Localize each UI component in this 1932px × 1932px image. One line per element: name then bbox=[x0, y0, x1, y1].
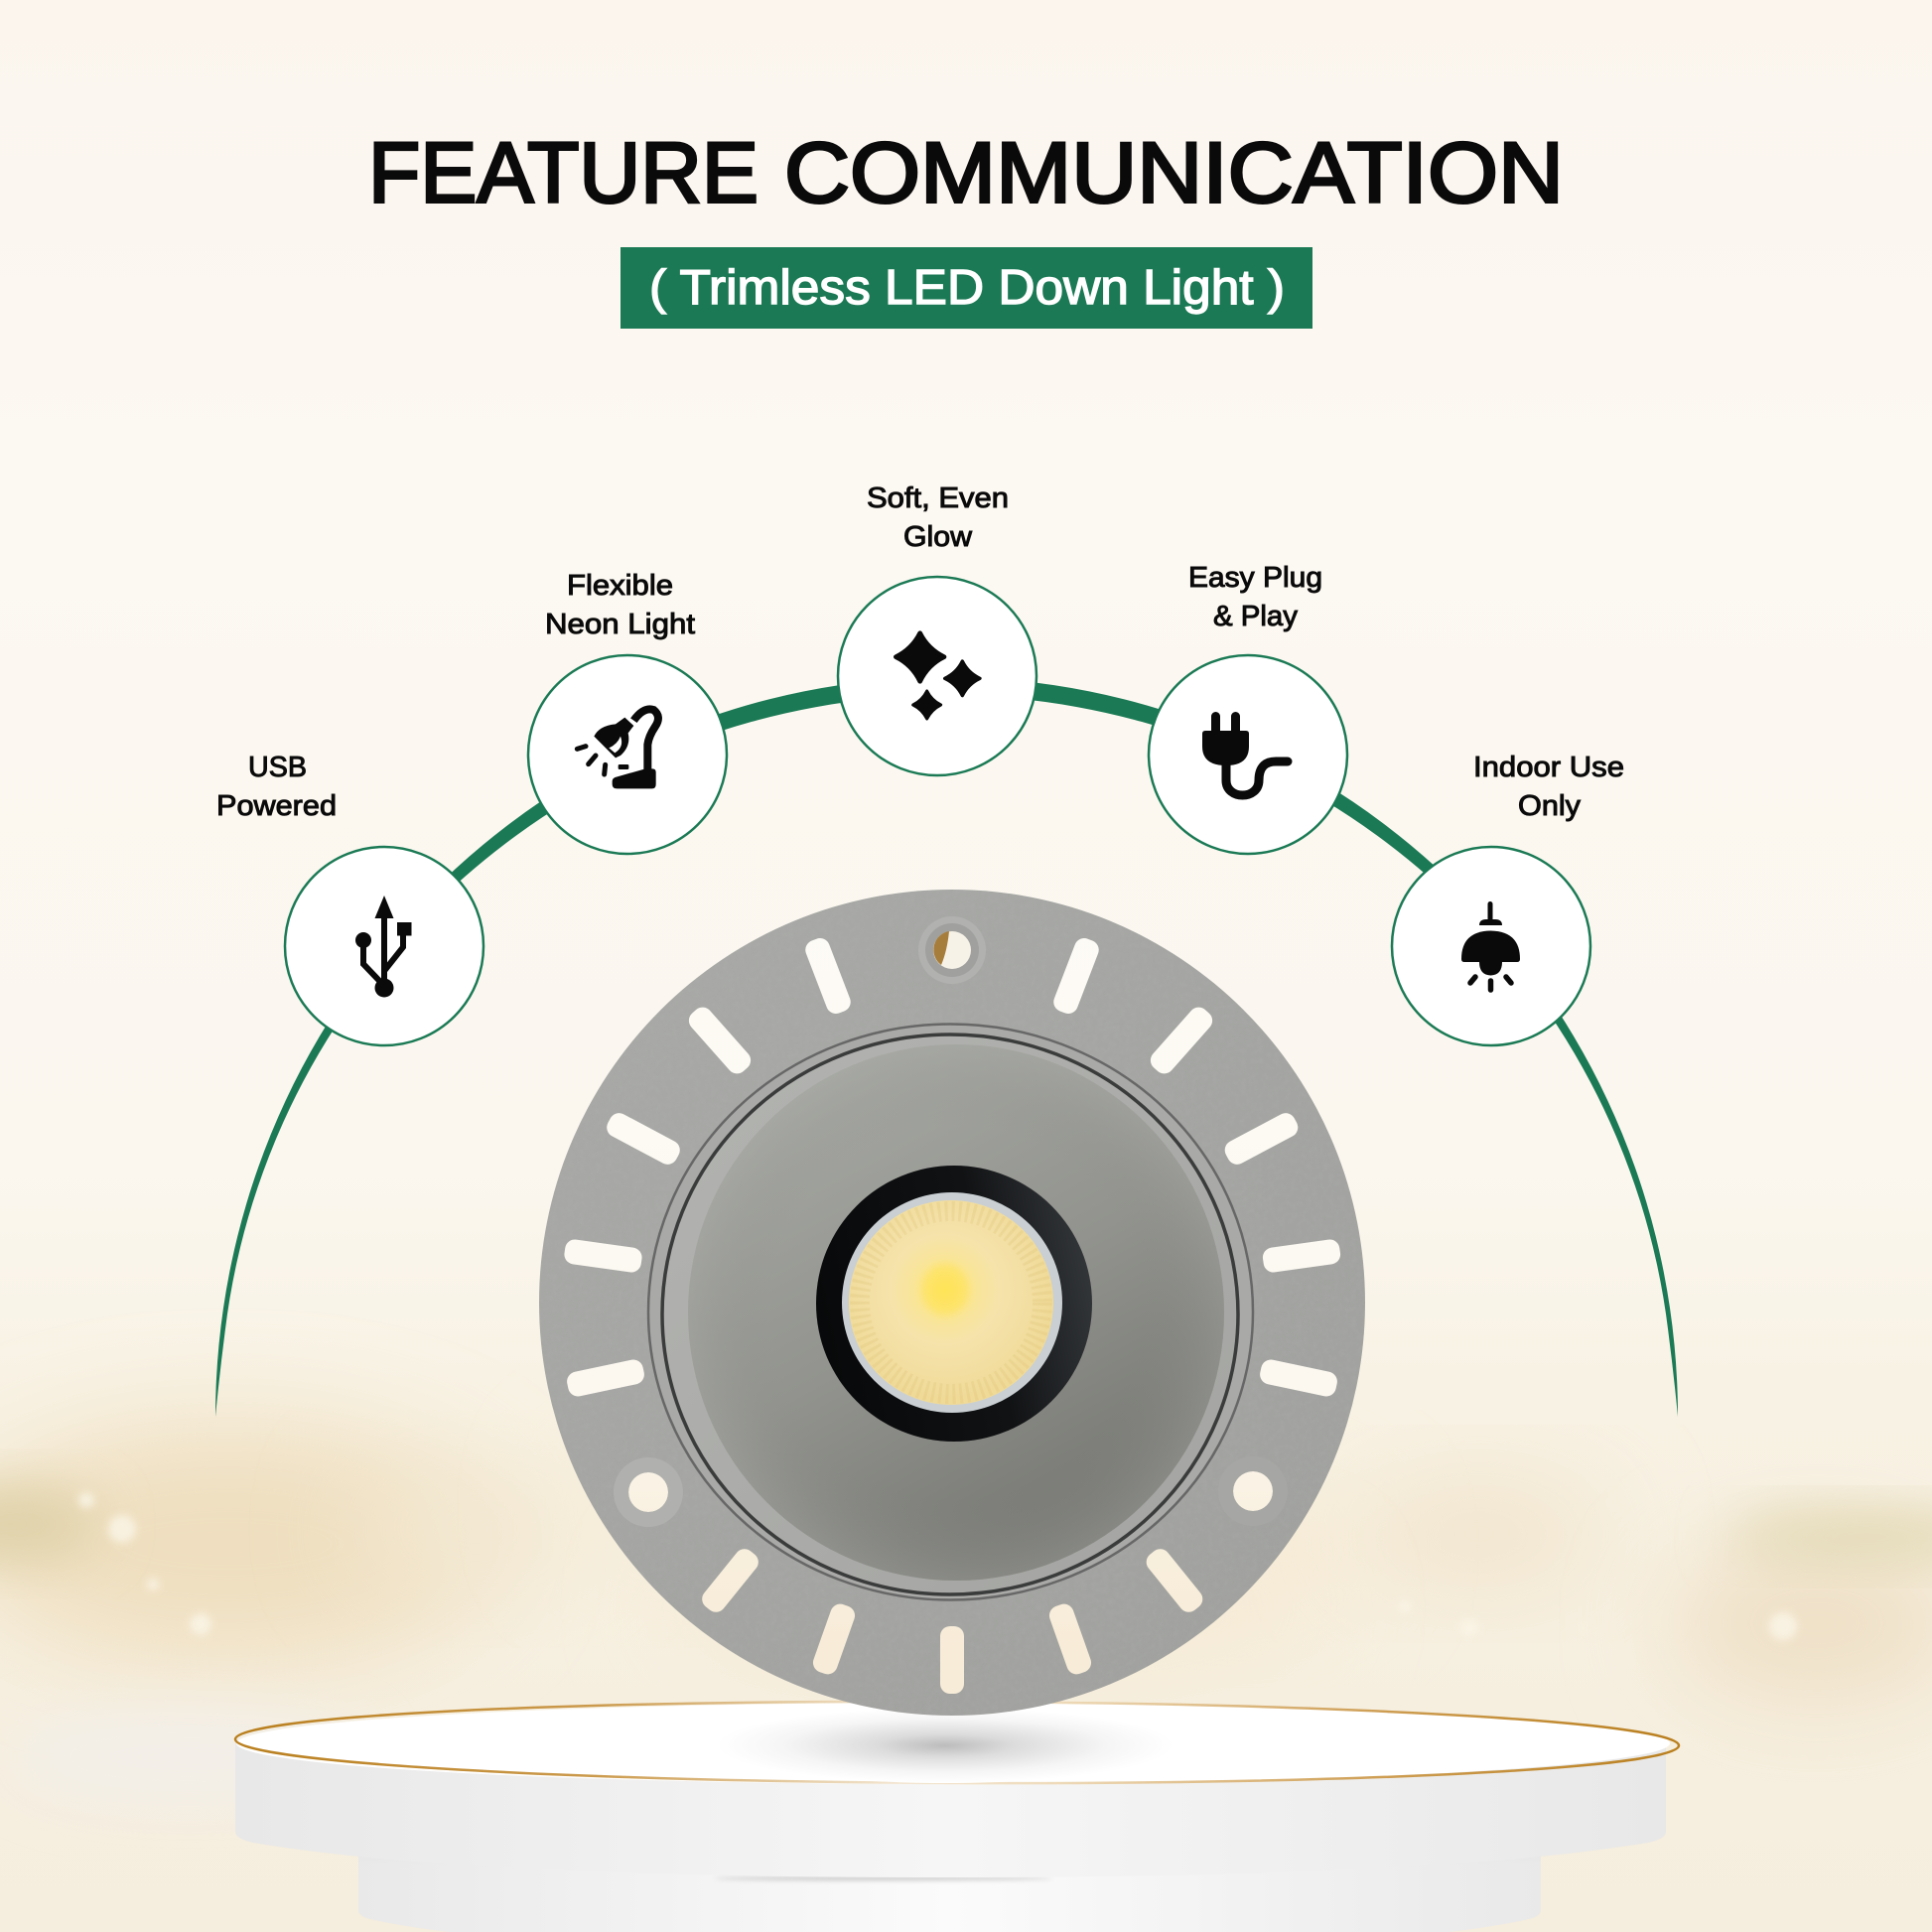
green tapered arc bbox=[215, 677, 1678, 1417]
cup bbox=[688, 1044, 1224, 1581]
label bbox=[216, 752, 337, 822]
icon: pendant lamp bbox=[1461, 901, 1520, 990]
circle bbox=[1149, 655, 1347, 854]
label bbox=[545, 570, 695, 640]
icon: sparkles bbox=[896, 633, 980, 719]
podium upper tier bbox=[235, 1743, 1666, 1877]
podium top surface bbox=[236, 1703, 1670, 1784]
left screw boss bbox=[614, 1457, 683, 1527]
icon: plug bbox=[1202, 712, 1288, 795]
node: Easy Plug & Play bbox=[1149, 562, 1347, 854]
node: USB Powered bbox=[216, 752, 483, 1045]
circle bbox=[838, 577, 1036, 775]
label bbox=[1188, 562, 1322, 632]
title: FEATURE bbox=[368, 125, 759, 220]
label: Glow bbox=[903, 521, 973, 553]
icon: desk lamp bbox=[577, 709, 658, 788]
flange with slots bbox=[536, 887, 1368, 1719]
platform: white stepped podium bbox=[235, 1699, 1679, 1932]
label: Flexible bbox=[567, 570, 673, 602]
podium gold outline bbox=[235, 1699, 1679, 1786]
label: USB bbox=[248, 752, 307, 783]
label: Neon Light bbox=[545, 609, 695, 640]
node: Indoor Use Only bbox=[1392, 752, 1624, 1045]
title bbox=[368, 125, 1564, 220]
lens bezel bbox=[842, 1192, 1062, 1413]
subtitle badge bbox=[621, 247, 1312, 329]
title: COMMUNICATION bbox=[784, 125, 1564, 220]
label: Indoor Use bbox=[1473, 752, 1624, 783]
circle bbox=[528, 655, 727, 854]
label: Soft, Even bbox=[867, 483, 1009, 514]
label bbox=[867, 483, 1009, 553]
node: Flexible Neon Light bbox=[528, 570, 727, 854]
product: trimless LED down light bbox=[536, 887, 1368, 1719]
podium lower tier bbox=[358, 1847, 1541, 1932]
label bbox=[1473, 752, 1624, 822]
black ring bbox=[816, 1166, 1092, 1442]
circle bbox=[1392, 847, 1590, 1045]
ring groove bbox=[648, 1025, 1253, 1600]
LED bbox=[849, 1200, 1053, 1405]
icon: USB bbox=[355, 896, 411, 997]
shadow under lamp bbox=[717, 1708, 1173, 1783]
right screw boss bbox=[1218, 1456, 1288, 1526]
subtitle badge: ( Trimless LED Down Light ) bbox=[649, 261, 1285, 315]
top screw boss bbox=[918, 916, 986, 984]
tier contact shadow bbox=[715, 1876, 1052, 1880]
label: & Play bbox=[1213, 601, 1298, 632]
circle bbox=[285, 847, 483, 1045]
label: Easy Plug bbox=[1188, 562, 1322, 594]
node: Soft, Even Glow bbox=[838, 483, 1036, 775]
slot backing bbox=[550, 900, 1354, 1705]
label: Powered bbox=[216, 790, 337, 822]
label: Only bbox=[1518, 790, 1582, 822]
